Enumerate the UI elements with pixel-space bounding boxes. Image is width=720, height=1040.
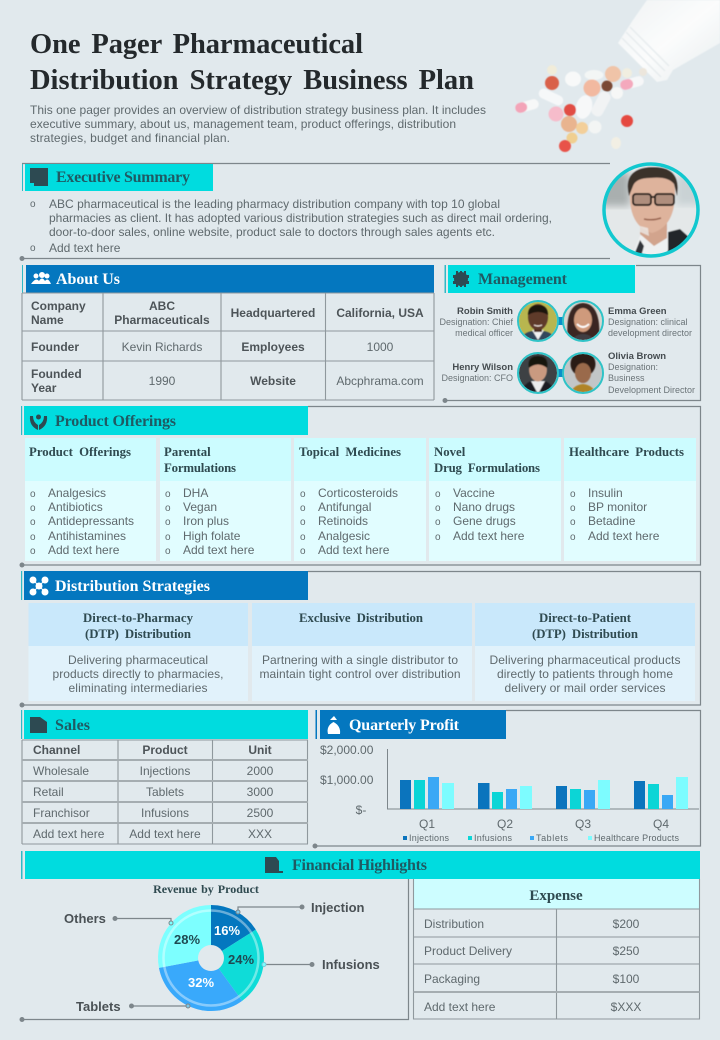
team member: Emma Green: development director xyxy=(608,328,692,338)
heading: executive summary: Executive Summary xyxy=(56,169,190,186)
heading: sales xyxy=(24,710,308,739)
bar chart: quarterly profit xyxy=(320,743,699,843)
table: sales by channel: Add text here xyxy=(129,827,201,841)
column: healthcare products: Insulin xyxy=(588,486,623,500)
column: product offerings: o xyxy=(30,532,36,543)
column: novel drug formulations: Novel xyxy=(434,445,466,459)
column: healthcare products: o xyxy=(570,532,576,543)
column: product offerings: Product Offerings xyxy=(29,445,131,459)
callout: others: Others xyxy=(64,911,106,926)
column: novel drug formulations: Drug Formulations xyxy=(434,461,540,475)
table: expense: Product Delivery xyxy=(424,944,512,958)
bar chart: quarterly profit: Q4 xyxy=(653,817,669,831)
card: direct-to-patient: Direct-to-Patient xyxy=(539,611,632,625)
table: expense: $200 xyxy=(613,917,640,931)
column: healthcare products: BP monitor xyxy=(588,500,647,514)
table: sales by channel: XXX xyxy=(248,827,272,841)
panel: about us xyxy=(22,265,434,400)
card: direct-to-patient: directly to patients through home xyxy=(497,667,673,681)
heading: management: Management xyxy=(478,271,568,288)
intro text block: executive summary, about us, management team, product offerings, distribution xyxy=(30,117,456,131)
table: sales by channel: 2000 xyxy=(247,764,274,778)
column: topical medicines: Analgesic xyxy=(318,529,370,543)
bar chart: quarterly profit: $2,000.00 xyxy=(320,743,374,757)
table: company facts: Name xyxy=(31,313,64,327)
table: company facts xyxy=(22,293,434,400)
team member: Robin Smith: Robin Smith xyxy=(457,306,513,317)
bar chart: quarterly profit: $1,000.00 xyxy=(320,773,374,787)
column: healthcare products: o xyxy=(570,489,576,500)
bar chart: quarterly profit: $- xyxy=(356,803,366,817)
intro text block xyxy=(30,103,486,145)
card: direct-to-patient: delivery or mail order services xyxy=(504,681,666,695)
text block: executive summary bullets: pharmacies as client. It has adopted various distribution strategies such as direct mail ordering, xyxy=(49,211,552,225)
table: expense: $250 xyxy=(613,944,640,958)
photo: executive portrait xyxy=(600,160,704,260)
team member: Emma Green xyxy=(563,301,692,344)
card: direct-to-pharmacy: products directly to pharmacies, xyxy=(52,667,224,681)
column: parental formulations: Parental xyxy=(164,445,211,459)
panel: quarterly profit xyxy=(312,710,700,848)
heading: distribution strategies xyxy=(24,571,308,600)
callout: tablets xyxy=(76,999,190,1014)
column: product offerings: Antihistamines xyxy=(48,529,126,543)
pie chart: revenue share: 24% xyxy=(228,952,254,967)
heading: quarterly profit xyxy=(320,710,506,739)
heading: executive summary xyxy=(25,164,213,191)
team member: Olivia Brown: Designation: xyxy=(608,362,658,372)
text block: executive summary bullets: ABC pharmaceutical is the leading pharmacy distribution company with top 10 global xyxy=(49,197,500,211)
column: product offerings: o xyxy=(30,546,36,557)
column: parental formulations: o xyxy=(165,503,171,514)
card: direct-to-pharmacy: Direct-to-Pharmacy xyxy=(83,611,194,625)
team member: Emma Green: Designation: clinical xyxy=(608,317,688,327)
table: sales by channel: Tablets xyxy=(146,785,184,799)
column: parental formulations: o xyxy=(165,489,171,500)
column: topical medicines: Retinoids xyxy=(318,514,368,528)
table: company facts: Kevin Richards xyxy=(122,340,202,354)
card: exclusive distribution xyxy=(252,603,472,701)
table: sales by channel: Wholesale xyxy=(33,764,89,778)
table: company facts: Founder xyxy=(31,340,79,354)
card: direct-to-pharmacy xyxy=(28,603,248,701)
panel: financial highlights heading: Financial Highlights xyxy=(292,857,427,874)
table: expense: Add text here xyxy=(424,1000,496,1014)
column: topical medicines: o xyxy=(300,532,306,543)
heading: sales: Sales xyxy=(55,717,90,734)
column: healthcare products: o xyxy=(570,517,576,528)
team member: Olivia Brown: Development Director xyxy=(608,385,695,395)
heading: product offerings: Product Offerings xyxy=(55,413,176,430)
column: novel drug formulations: Nano drugs xyxy=(453,500,515,514)
title: Distribution Strategy Business Plan xyxy=(30,65,474,96)
table: company facts: Website xyxy=(250,374,296,388)
table: sales by channel: Channel xyxy=(33,743,80,757)
column: topical medicines: Antifungal xyxy=(318,500,371,514)
text block: executive summary bullets xyxy=(30,197,552,255)
column: healthcare products: Add text here xyxy=(588,529,660,543)
column: product offerings: o xyxy=(30,489,36,500)
team member: Olivia Brown xyxy=(563,351,695,395)
table: sales by channel: Injections xyxy=(140,764,190,778)
card: exclusive distribution: Partnering with a single distributor to xyxy=(262,653,458,667)
table: company facts: ABC xyxy=(149,299,175,313)
column: topical medicines: Add text here xyxy=(318,543,390,557)
column: healthcare products xyxy=(564,438,696,561)
column: topical medicines xyxy=(294,438,426,561)
panel: revenue by product xyxy=(20,879,408,1022)
column: topical medicines: o xyxy=(300,546,306,557)
column: novel drug formulations: o xyxy=(435,532,441,543)
bar chart: quarterly profit: Q1 xyxy=(419,817,435,831)
chart legend: Infusions xyxy=(474,833,512,843)
heading: management xyxy=(448,265,635,293)
bar chart: quarterly profit: Q3 xyxy=(575,817,591,831)
column: product offerings: o xyxy=(30,517,36,528)
pie chart: revenue share: 16% xyxy=(214,923,240,938)
table: sales by channel: 3000 xyxy=(247,785,274,799)
column: parental formulations: Iron plus xyxy=(183,514,229,528)
column: novel drug formulations: Add text here xyxy=(453,529,525,543)
column: parental formulations: o xyxy=(165,532,171,543)
heading: product offerings xyxy=(24,406,308,435)
table: company facts: Year xyxy=(31,381,57,395)
column: healthcare products: Healthcare Products xyxy=(569,445,684,459)
table: company facts: Founded xyxy=(31,367,82,381)
text block: executive summary bullets: o xyxy=(30,243,36,254)
team member: Emma Green: Emma Green xyxy=(608,306,667,317)
column: topical medicines: o xyxy=(300,489,306,500)
table: company facts: California, USA xyxy=(336,306,424,320)
text block: executive summary bullets: door-to-door sales, online website, product sale to doctors through sales agents etc. xyxy=(49,225,495,239)
column: healthcare products: o xyxy=(570,503,576,514)
column: product offerings xyxy=(25,438,156,561)
column: parental formulations xyxy=(160,438,291,561)
column: parental formulations: Add text here xyxy=(183,543,255,557)
column: parental formulations: Formulations xyxy=(164,461,236,475)
team member: Henry Wilson xyxy=(441,353,558,394)
column: parental formulations: o xyxy=(165,546,171,557)
table: sales by channel xyxy=(22,740,308,844)
chart legend: Healthcare Products xyxy=(594,833,680,843)
panel: product offerings xyxy=(20,406,700,568)
team member: Robin Smith xyxy=(439,301,558,342)
table: sales by channel: Retail xyxy=(33,785,64,799)
heading: about us: About Us xyxy=(56,271,120,288)
intro text block: This one pager provides an overview of distribution strategy business plan. It includes xyxy=(30,103,486,117)
title: One Pager Pharmaceutical xyxy=(30,29,363,60)
column: novel drug formulations: Vaccine xyxy=(453,486,495,500)
text block: executive summary bullets: Add text here xyxy=(49,241,121,255)
card: direct-to-patient xyxy=(475,603,695,701)
callout: injection xyxy=(236,900,365,915)
team member: Robin Smith: medical officer xyxy=(455,328,513,338)
card: direct-to-pharmacy: Delivering pharmaceutical xyxy=(68,653,208,667)
panel: distribution strategies xyxy=(20,571,700,708)
table: company facts: Employees xyxy=(241,340,305,354)
column: parental formulations: o xyxy=(165,517,171,528)
panel: financial highlights heading xyxy=(21,851,700,879)
heading: distribution strategies: Distribution Strategies xyxy=(55,578,210,595)
card: direct-to-pharmacy: eliminating intermediaries xyxy=(68,681,208,695)
card: direct-to-pharmacy: (DTP) Distribution xyxy=(85,627,191,641)
column: topical medicines: o xyxy=(300,503,306,514)
table: company facts: Abcphrama.com xyxy=(336,374,424,388)
panel: revenue by product: Revenue by Product xyxy=(153,882,259,896)
bar chart: quarterly profit: Q2 xyxy=(497,817,513,831)
column: product offerings: Antidepressants xyxy=(48,514,134,528)
icon: pill bottle with spilled pills xyxy=(514,0,720,152)
table: expense: $100 xyxy=(613,972,640,986)
column: parental formulations: DHA xyxy=(183,486,208,500)
callout: infusions: Infusions xyxy=(322,957,380,972)
card: direct-to-patient: (DTP) Distribution xyxy=(532,627,638,641)
table: company facts: Company xyxy=(31,299,86,313)
table: sales by channel: 2500 xyxy=(247,806,274,820)
table: sales by channel: Add text here xyxy=(33,827,105,841)
intro text block: strategies, budget and financial plan. xyxy=(30,131,230,145)
text block: executive summary bullets: o xyxy=(30,199,36,210)
pie chart: revenue share xyxy=(158,905,264,1011)
column: parental formulations: High folate xyxy=(183,529,241,543)
team member: Robin Smith: Designation: Chief xyxy=(439,317,513,327)
table: sales by channel: Franchisor xyxy=(33,806,90,820)
column: novel drug formulations: o xyxy=(435,517,441,528)
table: expense: Expense xyxy=(529,888,583,904)
callout: infusions xyxy=(262,957,380,972)
table: company facts: 1990 xyxy=(149,374,176,388)
chart legend: Injections xyxy=(409,833,450,843)
table: company facts: Headquartered xyxy=(231,306,315,320)
heading: quarterly profit: Quarterly Profit xyxy=(349,717,460,734)
table: sales by channel: Infusions xyxy=(141,806,189,820)
column: healthcare products: Betadine xyxy=(588,514,636,528)
table: expense: Packaging xyxy=(424,972,480,986)
column: topical medicines: Corticosteroids xyxy=(318,486,398,500)
column: topical medicines: Topical Medicines xyxy=(299,445,401,459)
chart legend: Tablets xyxy=(536,833,568,843)
table: expense: Distribution xyxy=(424,917,484,931)
callout: injection: Injection xyxy=(311,900,365,915)
column: product offerings: Antibiotics xyxy=(48,500,103,514)
table: sales by channel: Product xyxy=(142,743,188,757)
heading: about us xyxy=(26,265,434,293)
column: parental formulations: Vegan xyxy=(183,500,217,514)
chart legend xyxy=(403,833,680,843)
panel: executive summary xyxy=(20,164,610,261)
column: topical medicines: o xyxy=(300,517,306,528)
column: novel drug formulations xyxy=(429,438,561,561)
column: product offerings: o xyxy=(30,503,36,514)
card: exclusive distribution: maintain tight control over distribution xyxy=(260,667,460,681)
pie chart: revenue share: 28% xyxy=(174,932,200,947)
team member: Olivia Brown: Business xyxy=(608,373,645,383)
column: product offerings: Add text here xyxy=(48,543,120,557)
table: sales by channel: Unit xyxy=(248,743,272,757)
table: expense: $XXX xyxy=(611,1000,641,1014)
callout: others xyxy=(64,911,173,926)
column: novel drug formulations: Gene drugs xyxy=(453,514,516,528)
panel: management xyxy=(439,265,700,403)
table: expense xyxy=(414,879,700,1019)
column: product offerings: Analgesics xyxy=(48,486,106,500)
team member: Henry Wilson: Designation: CFO xyxy=(441,373,513,383)
title xyxy=(30,29,474,96)
callout: tablets: Tablets xyxy=(76,999,121,1014)
team member: Henry Wilson: Henry Wilson xyxy=(452,362,513,373)
pie chart: revenue share: 32% xyxy=(188,975,214,990)
card: exclusive distribution: Exclusive Distribution xyxy=(299,611,423,625)
connector bars between portraits xyxy=(558,317,563,377)
table: company facts: 1000 xyxy=(367,340,394,354)
table: company facts: Pharmaceuticals xyxy=(114,313,210,327)
column: novel drug formulations: o xyxy=(435,503,441,514)
card: direct-to-patient: Delivering pharmaceutical products xyxy=(490,653,680,667)
panel: sales xyxy=(21,710,308,844)
team member: Olivia Brown: Olivia Brown xyxy=(608,351,666,362)
column: novel drug formulations: o xyxy=(435,489,441,500)
